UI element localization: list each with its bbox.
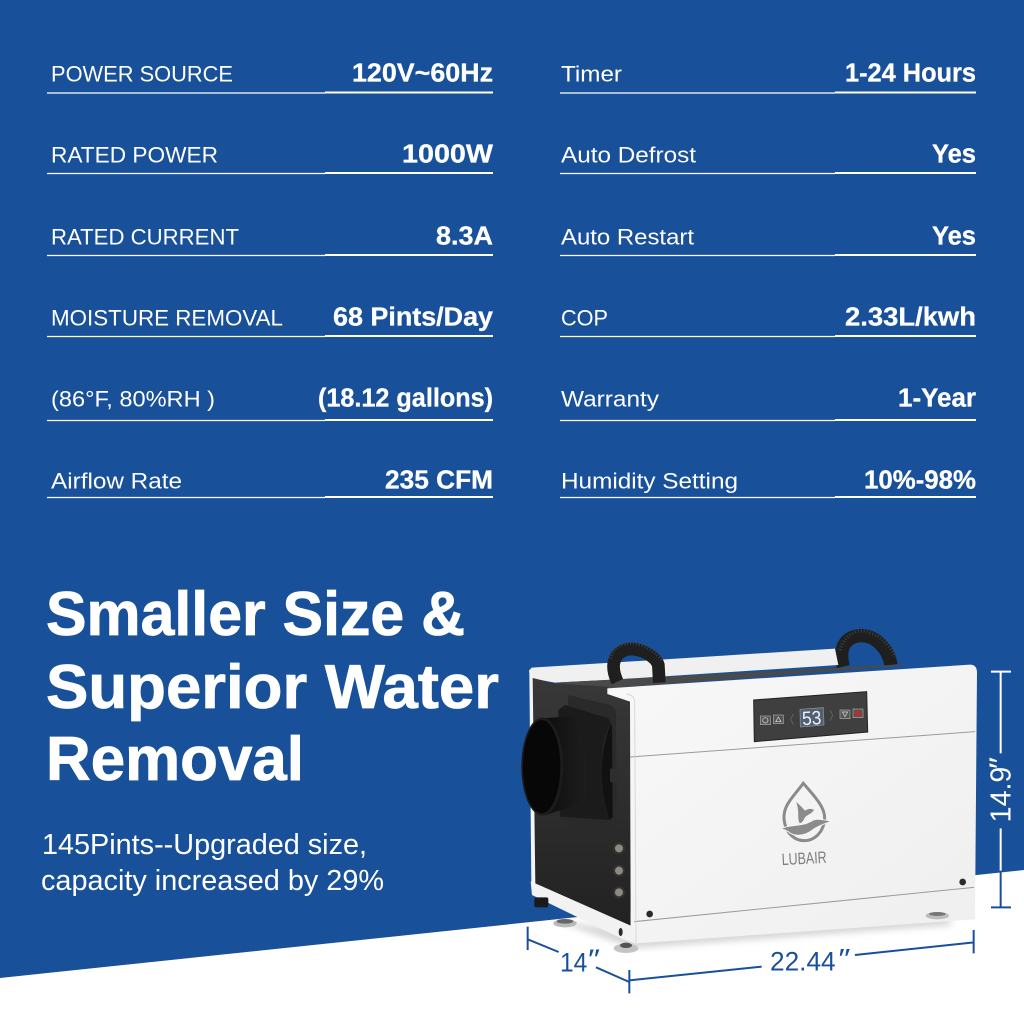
up button [773,715,783,724]
row: test condition: (86°F, 80%RH ) [51,386,215,412]
row: timer [560,60,976,93]
row: power source: 120V~60Hz [352,60,493,88]
heading [46,580,499,794]
row: rated power: RATED POWER [51,142,218,168]
floor shadow [553,913,953,948]
side latch [610,768,620,782]
row: warranty: Warranty [561,386,659,412]
row: auto restart: Yes [932,222,976,250]
row: rated power: 1000W [402,140,494,168]
power button [853,709,863,718]
logo: LUBAIR drop and whale tail [781,783,832,869]
row: moisture removal [47,304,494,336]
row: humidity setting: 10%-98% [864,466,976,494]
product: dehumidifier illustration [521,631,1017,993]
duct gasket plate [560,695,617,830]
row: COP: COP [561,306,608,330]
side knobs [614,843,624,897]
white rear edge strip [529,670,537,884]
duct cylinder [542,716,587,815]
row: COP [560,304,976,336]
duct inner [523,720,560,813]
row: rated power [47,140,494,174]
panel: right specification table [560,60,976,498]
row: power source [47,60,493,93]
text block: capacity note: 145Pints--Upgraded size, [42,829,367,861]
row: COP: 2.33L/kwh [845,304,976,332]
row: test condition [47,384,493,420]
logo: LUBAIR drop and whale tail: LUBAIR [781,848,827,869]
row: timer: Timer [561,62,622,86]
icon: rear handle [840,631,895,667]
row: warranty: 1-Year [898,384,976,412]
heading: Removal [46,725,304,794]
digital display [800,708,824,727]
dimension: width 22.44: ″ [838,943,850,973]
row: humidity setting [560,466,976,498]
row: auto restart: Auto Restart [561,224,694,250]
heading: Smaller Size & [46,580,465,649]
black side panel [533,678,631,926]
feet [553,912,949,953]
icon: front handle [610,643,663,683]
control panel: 53 [802,708,822,730]
row: rated current: RATED CURRENT [51,224,239,250]
down button [840,710,850,719]
dark recess strip [555,664,903,689]
dimension: height 14.9: 14.9 [985,767,1017,822]
row: auto defrost: Auto Defrost [561,142,696,168]
row: airflow rate: 235 CFM [385,466,493,494]
casing seams [627,694,975,943]
row: auto defrost: Yes [932,140,976,168]
row: moisture removal: 68 Pints/Day [333,304,494,332]
row: auto restart [560,222,976,256]
row: humidity setting: Humidity Setting [561,468,738,494]
row: rated current: 8.3A [436,222,493,250]
text block: capacity note: capacity increased by 29% [41,865,384,897]
dimension: width 22.44: 22.44 [770,947,836,977]
dimension: height 14.9: ″ [985,757,1017,769]
dimension: height 14.9 [985,672,1017,907]
duct flange [558,705,611,820]
dimension: depth 14 [528,927,629,982]
dimension: depth 14: ″ [588,944,600,974]
heading: Superior Water [46,653,499,722]
duct flange right lobe [602,723,613,820]
top lid [529,649,838,683]
front casing [607,665,977,943]
base rail [531,882,637,944]
screws [619,879,966,936]
text block: capacity note [41,829,384,897]
row: moisture removal: MOISTURE REMOVAL [51,306,283,330]
row: rated current [47,222,493,256]
drain connector [534,897,548,907]
row: timer: 1-24 Hours [845,60,976,88]
dimension: width 22.44 [629,930,974,993]
timer button [760,716,770,725]
row: warranty [560,384,976,420]
dimension: depth 14: 14 [560,947,587,977]
row: auto defrost [560,140,976,174]
control panel [754,692,868,742]
panel: left specification table [47,60,494,498]
duct opening [521,718,563,816]
chevrons [791,710,833,725]
row: airflow rate [47,466,493,498]
row: airflow rate: Airflow Rate [51,468,182,494]
row: test condition: (18.12 gallons) [318,384,493,412]
row: power source: POWER SOURCE [51,62,233,86]
white diagonal base [0,870,1024,1024]
